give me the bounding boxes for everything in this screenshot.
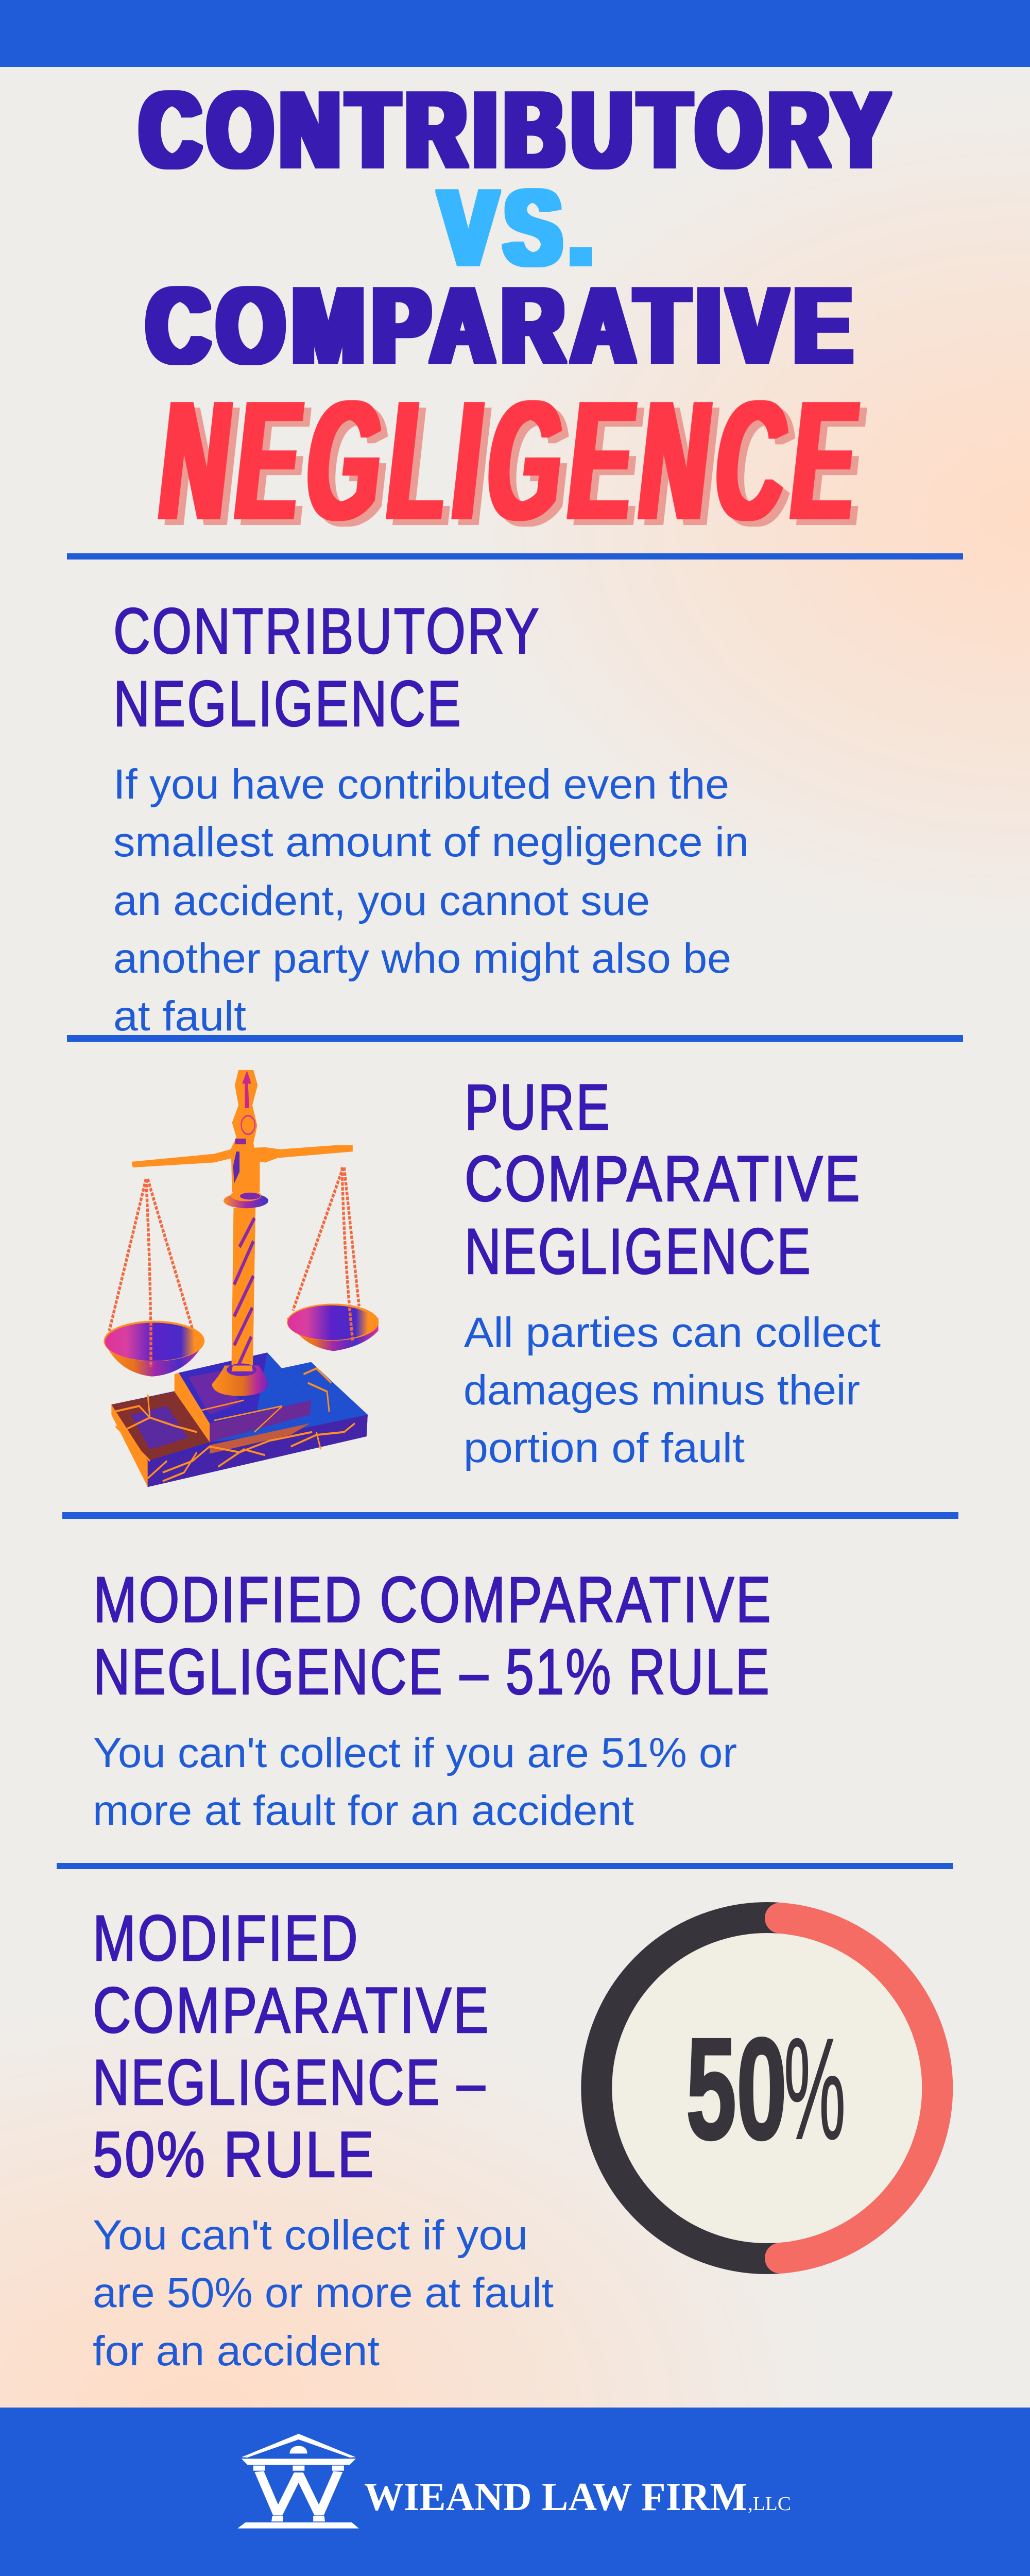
body text: 51% rule: more at fault for an accident <box>93 1787 634 1834</box>
chart: 50% donut: % <box>784 2009 846 2170</box>
body text: pure comparative negligence: All parties can collect <box>464 1309 881 1356</box>
heading: 50% rule <box>93 1903 490 2191</box>
title line: vs.: VS. <box>440 168 600 288</box>
heading: 50% rule: 50% RULE <box>93 2119 375 2191</box>
top header bar <box>0 0 1030 67</box>
body text: 50% rule: for an accident <box>93 2328 380 2375</box>
body text: contributory negligence: an accident, you cannot sue <box>113 877 650 924</box>
right pan <box>286 1303 379 1351</box>
donut arc: coral 50% <box>780 1918 937 2258</box>
balance beam <box>132 1145 353 1167</box>
body text: contributory negligence <box>113 761 749 1040</box>
marble base <box>111 1352 368 1487</box>
heading: 50% rule: NEGLIGENCE – <box>93 2047 487 2119</box>
heading: 50% rule: COMPARATIVE <box>93 1975 490 2046</box>
column finial <box>231 1070 260 1192</box>
heading: pure comparative negligence <box>465 1072 862 1287</box>
panel: modified comparative negligence 51% rule <box>93 1564 772 1834</box>
left pan <box>104 1320 205 1377</box>
firm name: WIEAND LAW FIRM <box>364 2475 747 2519</box>
illustration: scales of justice <box>104 1070 379 1487</box>
heading: 51% rule: MODIFIED COMPARATIVE <box>93 1564 772 1636</box>
body text: 50% rule <box>93 2212 554 2375</box>
body text: 51% rule <box>93 1730 737 1834</box>
body text: pure comparative negligence: portion of fault <box>464 1425 745 1471</box>
chart: 50% donut <box>596 1918 937 2259</box>
heading: contributory negligence: NEGLIGENCE <box>113 668 462 740</box>
body text: contributory negligence: If you have contributed even the <box>113 761 729 808</box>
panel: modified comparative negligence 50% rule <box>93 1903 554 2375</box>
heading: 51% rule: NEGLIGENCE – 51% RULE <box>93 1636 771 1708</box>
icon: law firm logo <box>237 2434 359 2529</box>
heading: 51% rule <box>93 1564 772 1708</box>
body text: 50% rule: are 50% or more at fault <box>93 2269 554 2316</box>
body text: contributory negligence: another party who might also be <box>113 935 731 982</box>
title <box>140 70 896 562</box>
heading: pure comparative negligence: NEGLIGENCE <box>465 1216 812 1287</box>
body text: pure comparative negligence: damages minus their <box>464 1367 860 1414</box>
body text: 50% rule: You can't collect if you <box>93 2212 528 2259</box>
title line: comparative: COMPARATIVE <box>147 266 860 386</box>
donut label: 50 <box>686 2009 787 2170</box>
firm suffix: ,LLC <box>748 2493 791 2515</box>
body text: pure comparative negligence <box>464 1309 881 1471</box>
heading: pure comparative negligence: COMPARATIVE <box>465 1143 862 1215</box>
base collar <box>212 1364 268 1396</box>
heading: pure comparative negligence: PURE <box>465 1072 611 1143</box>
heading: contributory negligence <box>113 596 541 740</box>
heading: contributory negligence: CONTRIBUTORY <box>113 596 541 667</box>
top collar <box>224 1190 268 1208</box>
body text: 51% rule: You can't collect if you are 51% or <box>93 1730 737 1776</box>
panel: contributory negligence <box>113 596 749 1040</box>
panel: pure comparative negligence <box>464 1072 881 1471</box>
chains <box>109 1167 359 1367</box>
footer bar <box>0 2408 1030 2576</box>
heading: 50% rule: MODIFIED <box>93 1903 359 1974</box>
column shaft <box>231 1208 255 1371</box>
body text: contributory negligence: at fault <box>113 993 246 1040</box>
body text: contributory negligence: smallest amount of negligence in <box>113 819 749 866</box>
